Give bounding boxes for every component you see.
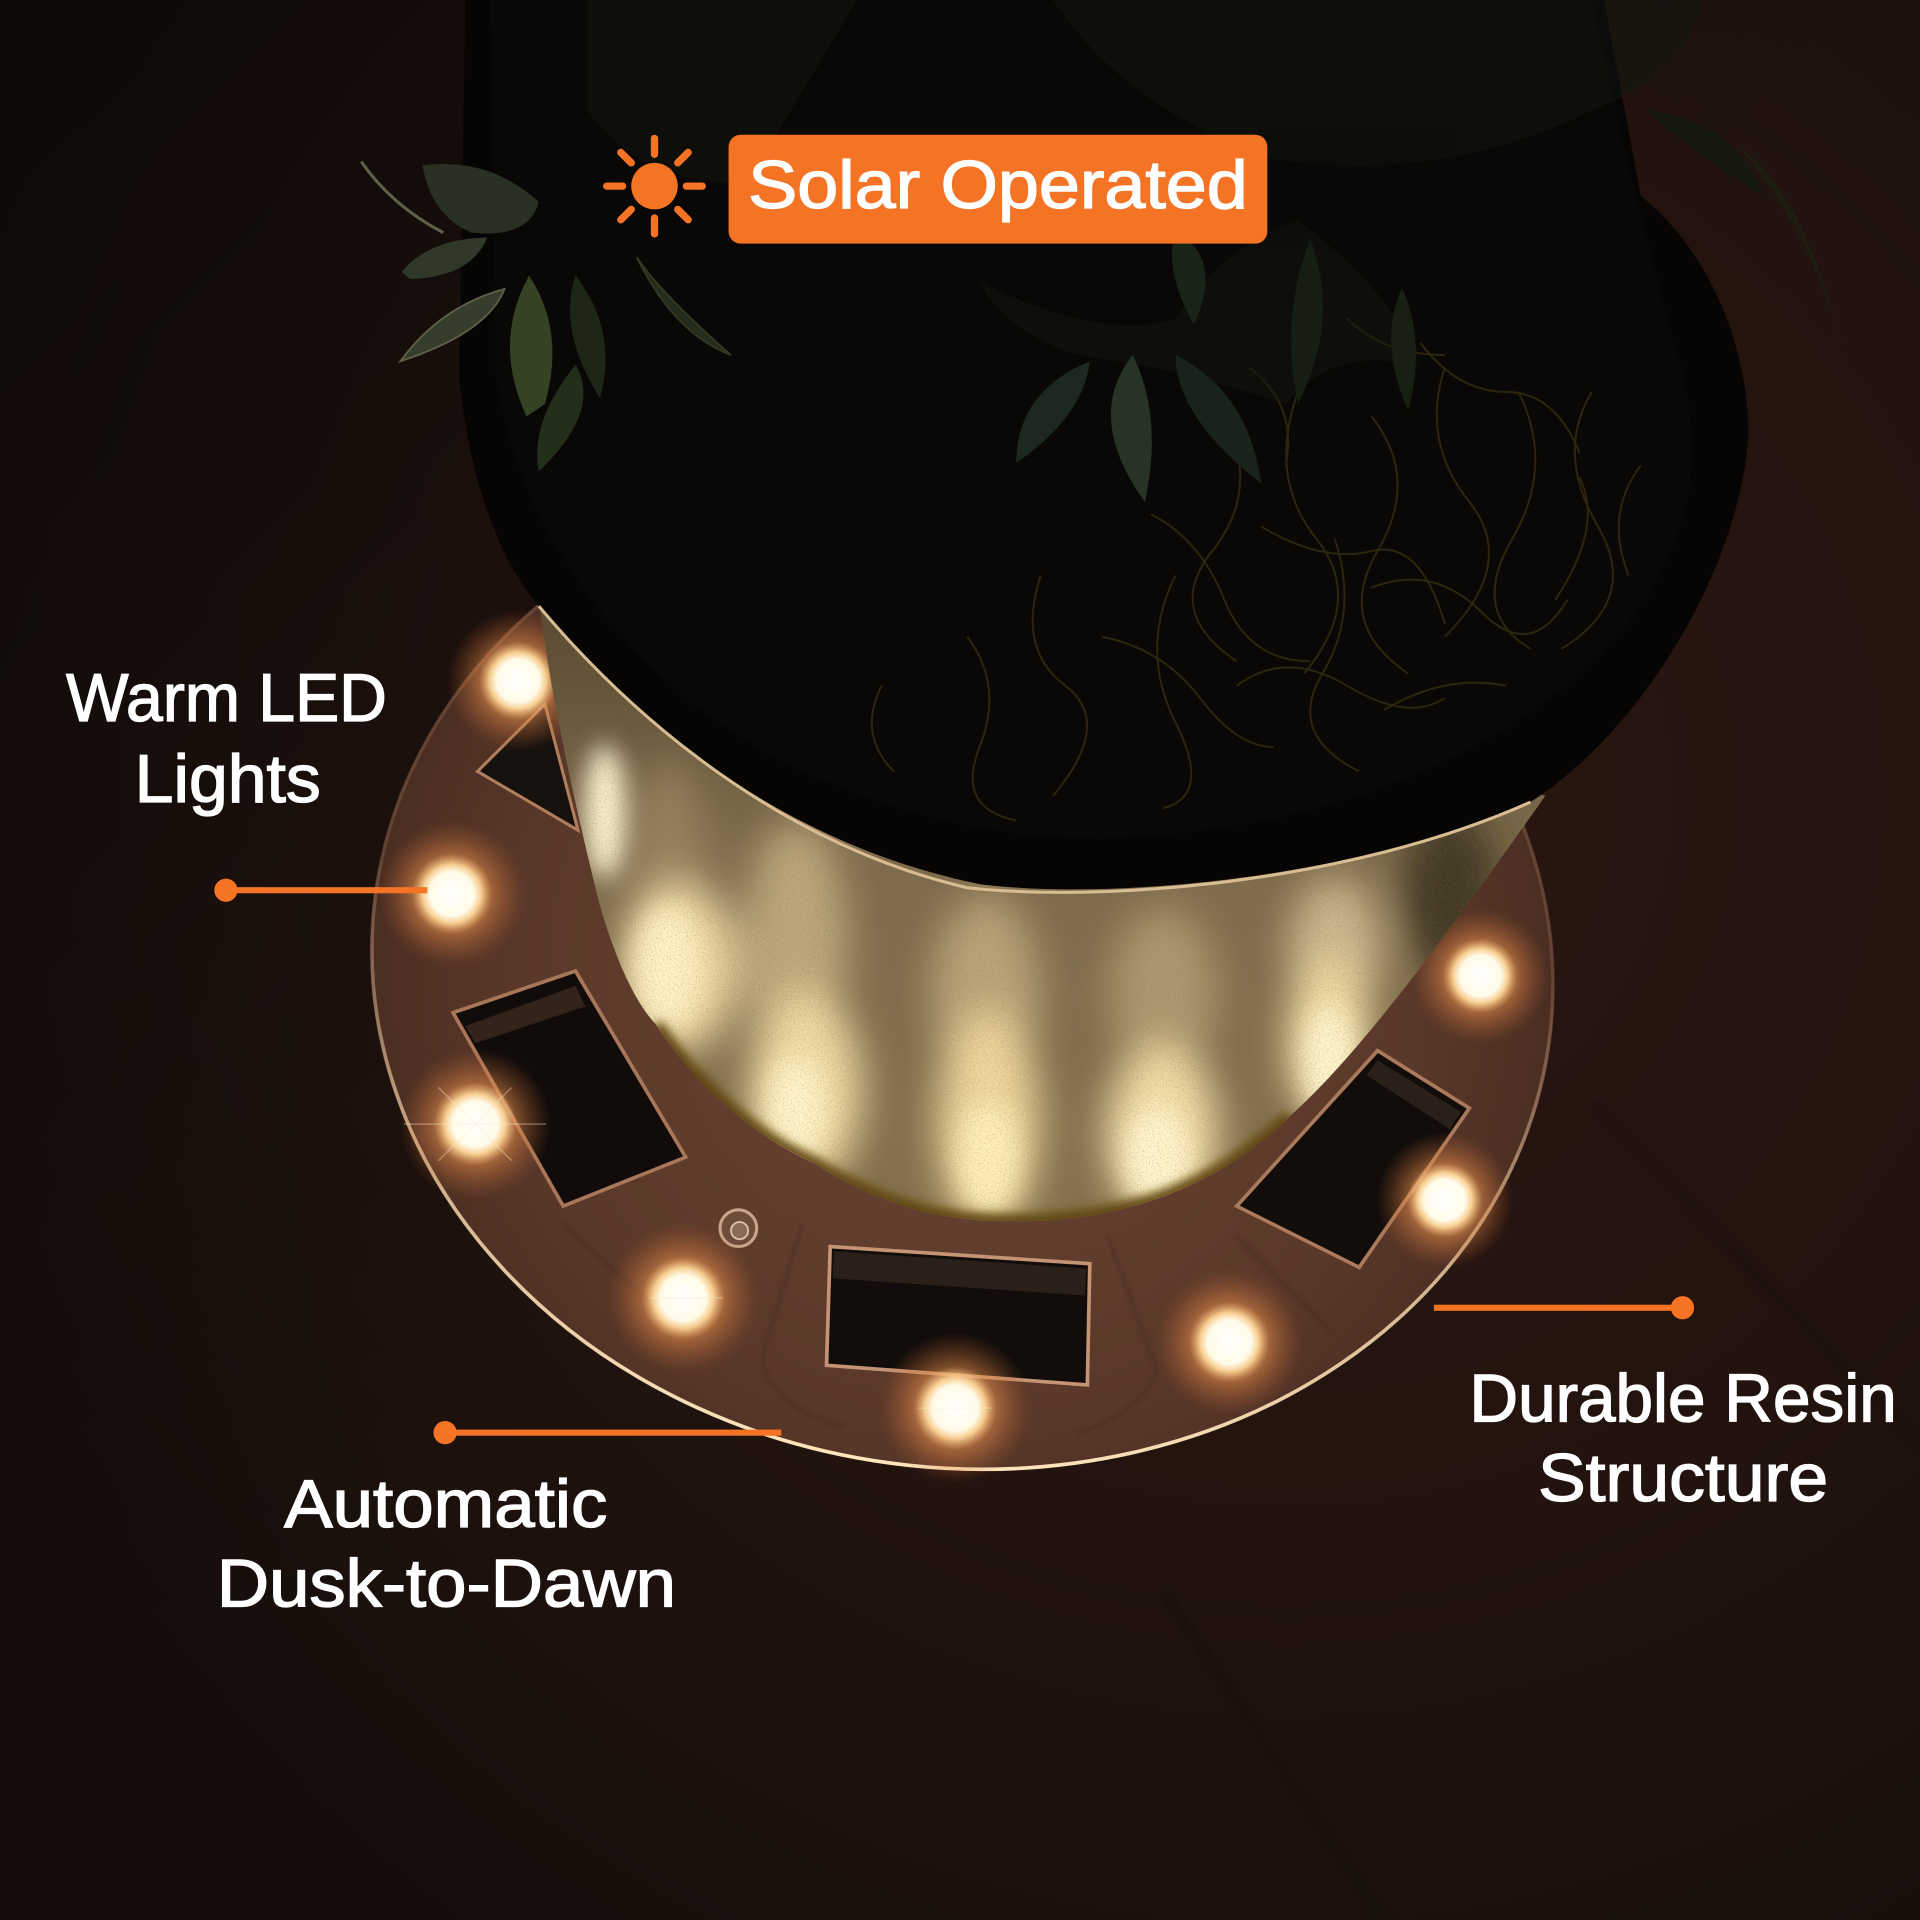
callout: Automatic Dusk-to-Dawn: Dusk-to-Dawn	[217, 1547, 676, 1622]
callout: Durable Resin Structure: Structure	[1538, 1441, 1828, 1516]
callout: Warm LED Lights: Warm LED	[66, 661, 387, 736]
sun icon	[607, 138, 702, 234]
plant leaves	[361, 110, 1843, 502]
callout: Warm LED Lights	[66, 661, 427, 902]
light sensor	[720, 1210, 757, 1247]
dark upper foliage	[588, 0, 1702, 404]
solar panel: center	[827, 1247, 1090, 1385]
callout: Automatic Dusk-to-Dawn	[217, 1421, 781, 1622]
solar panel: right	[1237, 1051, 1469, 1267]
planter metallic body	[540, 610, 1546, 1222]
dark gold lower edge	[656, 1025, 1289, 1221]
heading badge: Solar Operated: Solar Operated	[748, 148, 1248, 223]
warm LED lights	[378, 610, 1549, 1484]
round resin base plate	[321, 406, 1604, 1529]
callout: Durable Resin Structure: Durable Resin	[1469, 1362, 1897, 1437]
light bands on body	[621, 759, 1500, 1231]
pot and soil	[459, 0, 1749, 892]
moss strands	[872, 318, 1641, 820]
callout: Automatic Dusk-to-Dawn: Automatic	[284, 1467, 607, 1542]
heading badge: Solar Operated	[729, 135, 1267, 244]
solar panel: left	[453, 971, 686, 1206]
callout: Warm LED Lights: Lights	[135, 742, 321, 817]
solar panel: top left	[478, 704, 578, 830]
callout: Durable Resin Structure	[1434, 1296, 1897, 1516]
